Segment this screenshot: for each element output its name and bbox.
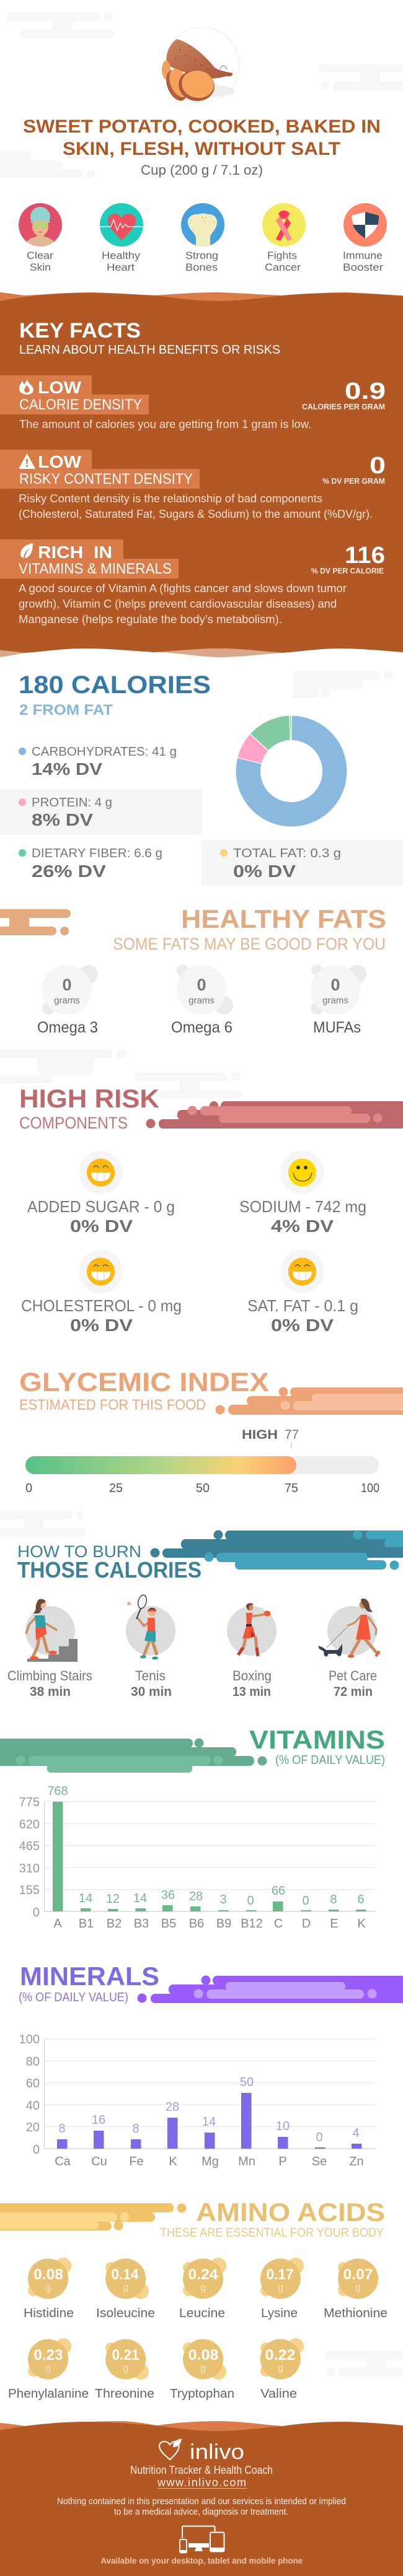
legend: total fat: 0% DV bbox=[233, 862, 296, 881]
amino: threonine: 0.21 bbox=[112, 2347, 139, 2364]
icon: healthy heart bbox=[100, 203, 143, 247]
amino: lysine: Lysine bbox=[261, 2307, 298, 2320]
fact: risky content density: 0 bbox=[370, 453, 386, 479]
bar chart: minerals: K bbox=[169, 2155, 177, 2168]
panel: footer bbox=[0, 2421, 403, 2576]
omega 3: 0 bbox=[62, 976, 72, 994]
subheading: ESTIMATED FOR THIS FOOD bbox=[19, 1397, 206, 1413]
amino: methionine bbox=[324, 2258, 388, 2320]
panel: high risk components bbox=[19, 1084, 403, 1335]
legend: total fat: TOTAL FAT: 0.3 g bbox=[233, 847, 341, 860]
gauge scale bbox=[25, 1482, 379, 1495]
amino: leucine: Leucine bbox=[179, 2307, 225, 2320]
amino: lysine: g bbox=[278, 2282, 283, 2293]
bar chart: vitamins: 768 bbox=[47, 1784, 68, 1798]
amino: tryptophan: Tryptophan bbox=[170, 2387, 234, 2401]
fact: risky content density: Risky Content density is the relationship of bad components bbox=[19, 492, 322, 505]
bar chart: vitamins: 0 bbox=[33, 1906, 40, 1919]
bar chart: vitamins: 3 bbox=[219, 1893, 227, 1906]
amino: tryptophan: 0.08 bbox=[188, 2347, 218, 2364]
subheading: (% OF DAILY VALUE) bbox=[275, 1753, 385, 1767]
bar chart: minerals: 28 bbox=[166, 2100, 179, 2114]
bar chart: vitamins: B5 bbox=[161, 1917, 176, 1931]
legend: total fat bbox=[220, 847, 341, 881]
heading: HIGH RISK bbox=[19, 1084, 159, 1113]
title bbox=[23, 116, 381, 159]
website: www.inlivo.com bbox=[157, 2476, 246, 2489]
heading: VITAMINS bbox=[249, 1725, 385, 1754]
heading: MINERALS bbox=[20, 1962, 159, 1991]
omega 6: grams bbox=[188, 995, 215, 1006]
cholesterol bbox=[21, 1250, 182, 1335]
gauge scale: 0 bbox=[25, 1482, 32, 1495]
bar chart: minerals: 4 bbox=[352, 2126, 360, 2140]
activity durations: 72 min bbox=[334, 1685, 373, 1699]
omega 6: 0 bbox=[197, 976, 206, 994]
cholesterol: 0% DV bbox=[70, 1316, 133, 1335]
amino: phenylalanine: 0.23 bbox=[33, 2347, 63, 2364]
heading: 180 CALORIES bbox=[19, 671, 211, 699]
sodium bbox=[239, 1151, 366, 1236]
legend: dietary fiber: DIETARY FIBER: 6.6 g bbox=[32, 847, 162, 860]
amino: leucine: 0.24 bbox=[188, 2266, 218, 2283]
fact: risky content density: (Cholesterol, Saturated Fat, Sugars & Sodium) to the amount (%DV/gr). bbox=[19, 508, 373, 520]
amino: lysine bbox=[260, 2258, 304, 2320]
legend: carbohydrates: CARBOHYDRATES: 41 g bbox=[32, 745, 177, 759]
bar chart: vitamins: 0 bbox=[302, 1894, 309, 1908]
panel: health benefits bbox=[19, 203, 387, 273]
title: SWEET POTATO, COOKED, BAKED IN bbox=[23, 116, 381, 137]
activity durations: 38 min bbox=[30, 1685, 71, 1699]
fact: risky content density: RISKY CONTENT DENSITY bbox=[19, 471, 193, 487]
amino: histidine bbox=[24, 2258, 74, 2320]
legend: dietary fiber: 26% DV bbox=[32, 862, 106, 881]
heading: KEY FACTS bbox=[19, 319, 141, 343]
saturated fat bbox=[247, 1250, 358, 1335]
amino: threonine: g bbox=[123, 2363, 128, 2373]
subheading: THESE ARE ESSENTIAL FOR YOUR BODY bbox=[160, 2226, 384, 2240]
fact: rich in vitamins and minerals: RICH IN bbox=[38, 543, 112, 562]
bar chart: vitamins: D bbox=[302, 1917, 311, 1931]
panel: key facts bbox=[0, 292, 403, 657]
bar chart: vitamins: K bbox=[357, 1917, 366, 1931]
fact: risky content density: LOW bbox=[38, 452, 82, 471]
fact: rich in vitamins and minerals bbox=[0, 539, 385, 626]
bar chart: vitamins: 775 bbox=[19, 1796, 40, 1809]
mufas: MUFAs bbox=[313, 1019, 361, 1036]
fact: rich in vitamins and minerals: % DV PER CALORIE bbox=[311, 566, 384, 575]
activity labels: Climbing Stairs bbox=[7, 1668, 92, 1683]
bar chart: vitamins: 28 bbox=[189, 1890, 203, 1903]
decoration: teal stripes bbox=[150, 1530, 403, 1570]
activity labels: Tenis bbox=[135, 1668, 166, 1683]
benefit labels: Heart bbox=[107, 261, 135, 273]
bar chart: vitamins: A bbox=[53, 1917, 62, 1931]
bar chart: minerals: Zn bbox=[349, 2155, 364, 2168]
bar chart: minerals: 10 bbox=[276, 2120, 290, 2133]
sodium: SODIUM - 742 mg bbox=[239, 1197, 366, 1216]
bar chart: vitamins bbox=[19, 1784, 375, 1931]
benefit labels bbox=[27, 250, 383, 273]
bar chart: minerals: 40 bbox=[26, 2099, 40, 2113]
activity labels: Pet Care bbox=[329, 1668, 377, 1683]
logo bbox=[159, 2438, 244, 2464]
heading: LEARN ABOUT HEALTH BENEFITS OR RISKS bbox=[19, 343, 280, 357]
donut chart bbox=[236, 715, 347, 827]
legend: dietary fiber bbox=[19, 847, 162, 881]
decoration: orange stripes bbox=[0, 909, 71, 935]
bar chart: minerals: 100 bbox=[19, 2033, 40, 2046]
value marker: 77 bbox=[285, 1428, 299, 1442]
amino: methionine: g bbox=[355, 2282, 361, 2293]
fact: rich in vitamins and minerals: 116 bbox=[345, 543, 385, 569]
disclaimer: Nothing contained in this presentation and our services is intended or implied bbox=[57, 2497, 346, 2507]
bar chart: minerals: 0 bbox=[316, 2131, 323, 2144]
value marker bbox=[242, 1428, 299, 1449]
amino: leucine bbox=[179, 2258, 226, 2320]
legend: carbohydrates bbox=[19, 745, 177, 779]
bar chart: minerals: Se bbox=[312, 2155, 327, 2168]
fact: calorie density: CALORIE DENSITY bbox=[19, 396, 142, 413]
amino: valine: 0.22 bbox=[265, 2347, 295, 2364]
benefit labels: Cancer bbox=[265, 261, 301, 273]
fact: calorie density: The amount of calories you are getting from 1 gram is low. bbox=[19, 418, 311, 430]
bar chart: minerals: Fe bbox=[129, 2155, 144, 2168]
bar chart: minerals: Mn bbox=[238, 2155, 255, 2168]
bar chart: vitamins: E bbox=[330, 1917, 339, 1931]
activity: tennis bbox=[126, 1594, 175, 1660]
icon: leaf bbox=[20, 543, 33, 558]
bar chart: vitamins: 12 bbox=[106, 1892, 120, 1906]
bar chart: vitamins: 14 bbox=[133, 1892, 147, 1905]
panel: minerals bbox=[19, 1962, 403, 2168]
cholesterol: CHOLESTEROL - 0 mg bbox=[21, 1296, 182, 1315]
panel: how to burn those calories bbox=[7, 1530, 403, 1699]
subheading: COMPONENTS bbox=[19, 1114, 128, 1132]
bar chart: minerals: 20 bbox=[26, 2121, 40, 2134]
fact: calorie density: 0.9 bbox=[345, 378, 386, 404]
icon: immune booster bbox=[343, 203, 387, 247]
amino: isoleucine bbox=[96, 2258, 155, 2320]
bar chart: minerals: 50 bbox=[240, 2076, 254, 2089]
bar chart: minerals: 14 bbox=[202, 2115, 216, 2129]
amino: histidine: g bbox=[45, 2282, 51, 2293]
amino: tryptophan bbox=[170, 2339, 234, 2401]
disclaimer bbox=[57, 2497, 346, 2517]
benefit labels: Skin bbox=[30, 261, 51, 273]
bar chart: vitamins: 620 bbox=[19, 1818, 40, 1832]
subheading: SOME FATS MAY BE GOOD FOR YOU bbox=[113, 935, 386, 953]
gauge scale: 50 bbox=[196, 1482, 210, 1495]
tagline: Nutrition Tracker & Health Coach bbox=[130, 2464, 273, 2476]
benefit labels: Booster bbox=[343, 261, 383, 273]
bar chart: minerals: Ca bbox=[55, 2155, 71, 2168]
icon: flame bbox=[19, 378, 33, 395]
title: SKIN, FLESH, WITHOUT SALT bbox=[63, 139, 340, 159]
mufas bbox=[311, 964, 366, 1036]
benefit labels: Immune bbox=[343, 250, 383, 261]
amino: histidine: Histidine bbox=[24, 2307, 74, 2320]
amino: tryptophan: g bbox=[200, 2363, 206, 2373]
bar chart: vitamins: 310 bbox=[19, 1862, 40, 1875]
benefit labels: Bones bbox=[185, 261, 218, 273]
amino: phenylalanine: g bbox=[45, 2363, 51, 2373]
fact: risky content density: % DV PER GRAM bbox=[322, 476, 385, 486]
activity labels: Boxing bbox=[232, 1668, 272, 1683]
fact: calorie density: CALORIES PER GRAM bbox=[302, 402, 385, 411]
icon: devices bbox=[180, 2526, 224, 2553]
panel: how to burn those calories: THOSE CALORIES bbox=[17, 1557, 202, 1583]
benefit labels: Clear bbox=[27, 250, 53, 261]
added sugar bbox=[27, 1151, 175, 1236]
amino: isoleucine: g bbox=[123, 2282, 128, 2293]
fact: rich in vitamins and minerals: Manganese (helps regulate the body’s metabolism). bbox=[19, 613, 282, 626]
bar chart: vitamins: 0 bbox=[247, 1894, 254, 1908]
gauge scale: 25 bbox=[109, 1482, 123, 1495]
heading: AMINO ACIDS bbox=[196, 2198, 385, 2227]
activity durations: 30 min bbox=[131, 1685, 172, 1699]
activity labels bbox=[7, 1668, 377, 1683]
bar chart: minerals: 8 bbox=[132, 2122, 140, 2136]
bar chart: vitamins: B9 bbox=[216, 1917, 231, 1931]
bar chart: vitamins: 155 bbox=[19, 1884, 40, 1897]
bar chart: minerals: 16 bbox=[92, 2113, 105, 2127]
amino: leucine: g bbox=[200, 2282, 206, 2293]
bar chart: vitamins: 6 bbox=[357, 1893, 365, 1906]
fact: rich in vitamins and minerals: VITAMINS & MINERALS bbox=[19, 561, 172, 577]
amino: phenylalanine bbox=[8, 2338, 89, 2401]
amino: methionine: Methionine bbox=[324, 2307, 388, 2320]
serving size: Cup (200 g / 7.1 oz) bbox=[141, 162, 263, 178]
bar chart: minerals: Cu bbox=[91, 2155, 107, 2168]
decoration: red stripes bbox=[146, 1101, 403, 1129]
gauge bar bbox=[25, 1456, 379, 1474]
sodium: 4% DV bbox=[271, 1216, 334, 1236]
omega 6 bbox=[171, 964, 233, 1036]
amino: methionine: 0.07 bbox=[343, 2266, 373, 2283]
decoration: yellow stripes bbox=[0, 2203, 186, 2230]
panel: glycemic index bbox=[19, 1368, 403, 1495]
benefit labels: Strong bbox=[185, 250, 218, 261]
heading bbox=[19, 319, 280, 357]
bar chart: vitamins: 66 bbox=[272, 1884, 285, 1898]
omega 3 bbox=[37, 965, 98, 1036]
legend: carbohydrates: 14% DV bbox=[32, 759, 102, 779]
icon: strong bones bbox=[181, 203, 224, 248]
subheading: (% OF DAILY VALUE) bbox=[19, 1991, 128, 2004]
mufas: 0 bbox=[330, 976, 340, 994]
amino: lysine: 0.17 bbox=[267, 2266, 294, 2283]
bar chart: vitamins: 14 bbox=[79, 1892, 92, 1905]
value marker: HIGH bbox=[242, 1428, 278, 1442]
saturated fat: 0% DV bbox=[271, 1316, 334, 1335]
icon: sweet potato photo bbox=[162, 27, 239, 104]
omega 6: Omega 6 bbox=[171, 1019, 232, 1036]
bar chart: vitamins: B3 bbox=[134, 1917, 149, 1931]
panel: calories bbox=[0, 671, 403, 886]
benefit labels: Healthy bbox=[102, 250, 141, 261]
bar chart: minerals: P bbox=[278, 2155, 287, 2168]
panel: healthy fats bbox=[0, 904, 386, 1036]
legend: protein: 8% DV bbox=[32, 810, 93, 829]
panel: vitamins bbox=[0, 1725, 385, 1931]
decoration: orange stripes bbox=[216, 1387, 403, 1415]
icon: warning triangle bbox=[19, 453, 35, 469]
bar chart: minerals: 80 bbox=[26, 2055, 40, 2069]
icon: fights cancer bbox=[262, 203, 306, 247]
amino: isoleucine: 0.14 bbox=[112, 2266, 139, 2283]
bar chart: minerals: Mg bbox=[202, 2155, 219, 2168]
bar chart: vitamins: 8 bbox=[330, 1893, 337, 1906]
icon: clear skin bbox=[19, 203, 62, 247]
activity: pet care bbox=[318, 1599, 379, 1657]
heading: HOW TO BURN bbox=[17, 1542, 141, 1561]
fact: calorie density bbox=[0, 375, 386, 430]
bar chart: vitamins: B1 bbox=[79, 1917, 94, 1931]
amino: threonine: Threonine bbox=[95, 2387, 154, 2401]
availability note: Available on your desktop, tablet and mobile phone bbox=[100, 2556, 303, 2565]
bar chart: vitamins: B6 bbox=[189, 1917, 204, 1931]
omega 3: grams bbox=[54, 995, 80, 1006]
gauge scale: 100 bbox=[361, 1482, 379, 1495]
fact: calorie density: LOW bbox=[38, 378, 82, 397]
bar chart: minerals: 8 bbox=[58, 2122, 66, 2136]
added sugar: ADDED SUGAR - 0 g bbox=[27, 1197, 175, 1216]
bar chart: vitamins: B2 bbox=[107, 1917, 122, 1931]
mufas: grams bbox=[322, 995, 348, 1006]
bar chart: vitamins: 36 bbox=[161, 1888, 175, 1902]
logo: inlivo bbox=[190, 2440, 244, 2464]
fact: risky content density bbox=[0, 450, 386, 520]
bar chart: minerals: 60 bbox=[26, 2077, 40, 2090]
bar chart: vitamins: B12 bbox=[241, 1917, 263, 1931]
saturated fat: SAT. FAT - 0.1 g bbox=[247, 1296, 358, 1315]
panel: amino acids bbox=[0, 2198, 388, 2401]
amino: valine bbox=[260, 2338, 304, 2401]
fact: rich in vitamins and minerals: growth), Vitamin C (helps prevent cardiovascular diseases) and bbox=[19, 598, 337, 610]
decoration: green stripes bbox=[0, 1738, 267, 1773]
amino: isoleucine: Isoleucine bbox=[96, 2307, 155, 2320]
bar chart: vitamins: C bbox=[274, 1917, 283, 1931]
bar chart: vitamins: 465 bbox=[19, 1840, 40, 1853]
heading: GLYCEMIC INDEX bbox=[19, 1368, 269, 1397]
amino: valine: g bbox=[278, 2363, 283, 2373]
decoration: purple stripes bbox=[138, 1976, 403, 2003]
gauge scale: 75 bbox=[285, 1482, 298, 1495]
added sugar: 0% DV bbox=[70, 1216, 133, 1236]
activity durations bbox=[30, 1685, 373, 1699]
amino: histidine: 0.08 bbox=[33, 2266, 63, 2283]
benefit labels: Fights bbox=[267, 250, 297, 261]
omega 3: Omega 3 bbox=[37, 1019, 98, 1036]
activity: climbing stairs bbox=[25, 1599, 78, 1662]
amino: threonine bbox=[95, 2339, 154, 2401]
legend: protein bbox=[19, 796, 112, 829]
amino: valine: Valine bbox=[260, 2387, 297, 2401]
amino: phenylalanine: Phenylalanine bbox=[8, 2387, 89, 2401]
fact: rich in vitamins and minerals: A good source of Vitamin A (fights cancer and slows down tumor bbox=[19, 582, 347, 595]
disclaimer: to be a medical advice, diagnosis or treatment. bbox=[114, 2507, 288, 2517]
subheading: 2 FROM FAT bbox=[19, 702, 113, 718]
activity durations: 13 min bbox=[232, 1685, 271, 1699]
heading: HEALTHY FATS bbox=[181, 904, 386, 933]
legend: protein: PROTEIN: 4 g bbox=[32, 796, 112, 810]
bar chart: minerals bbox=[19, 2033, 375, 2168]
bar chart: minerals: 0 bbox=[33, 2143, 40, 2157]
activity: boxing bbox=[227, 1603, 277, 1656]
